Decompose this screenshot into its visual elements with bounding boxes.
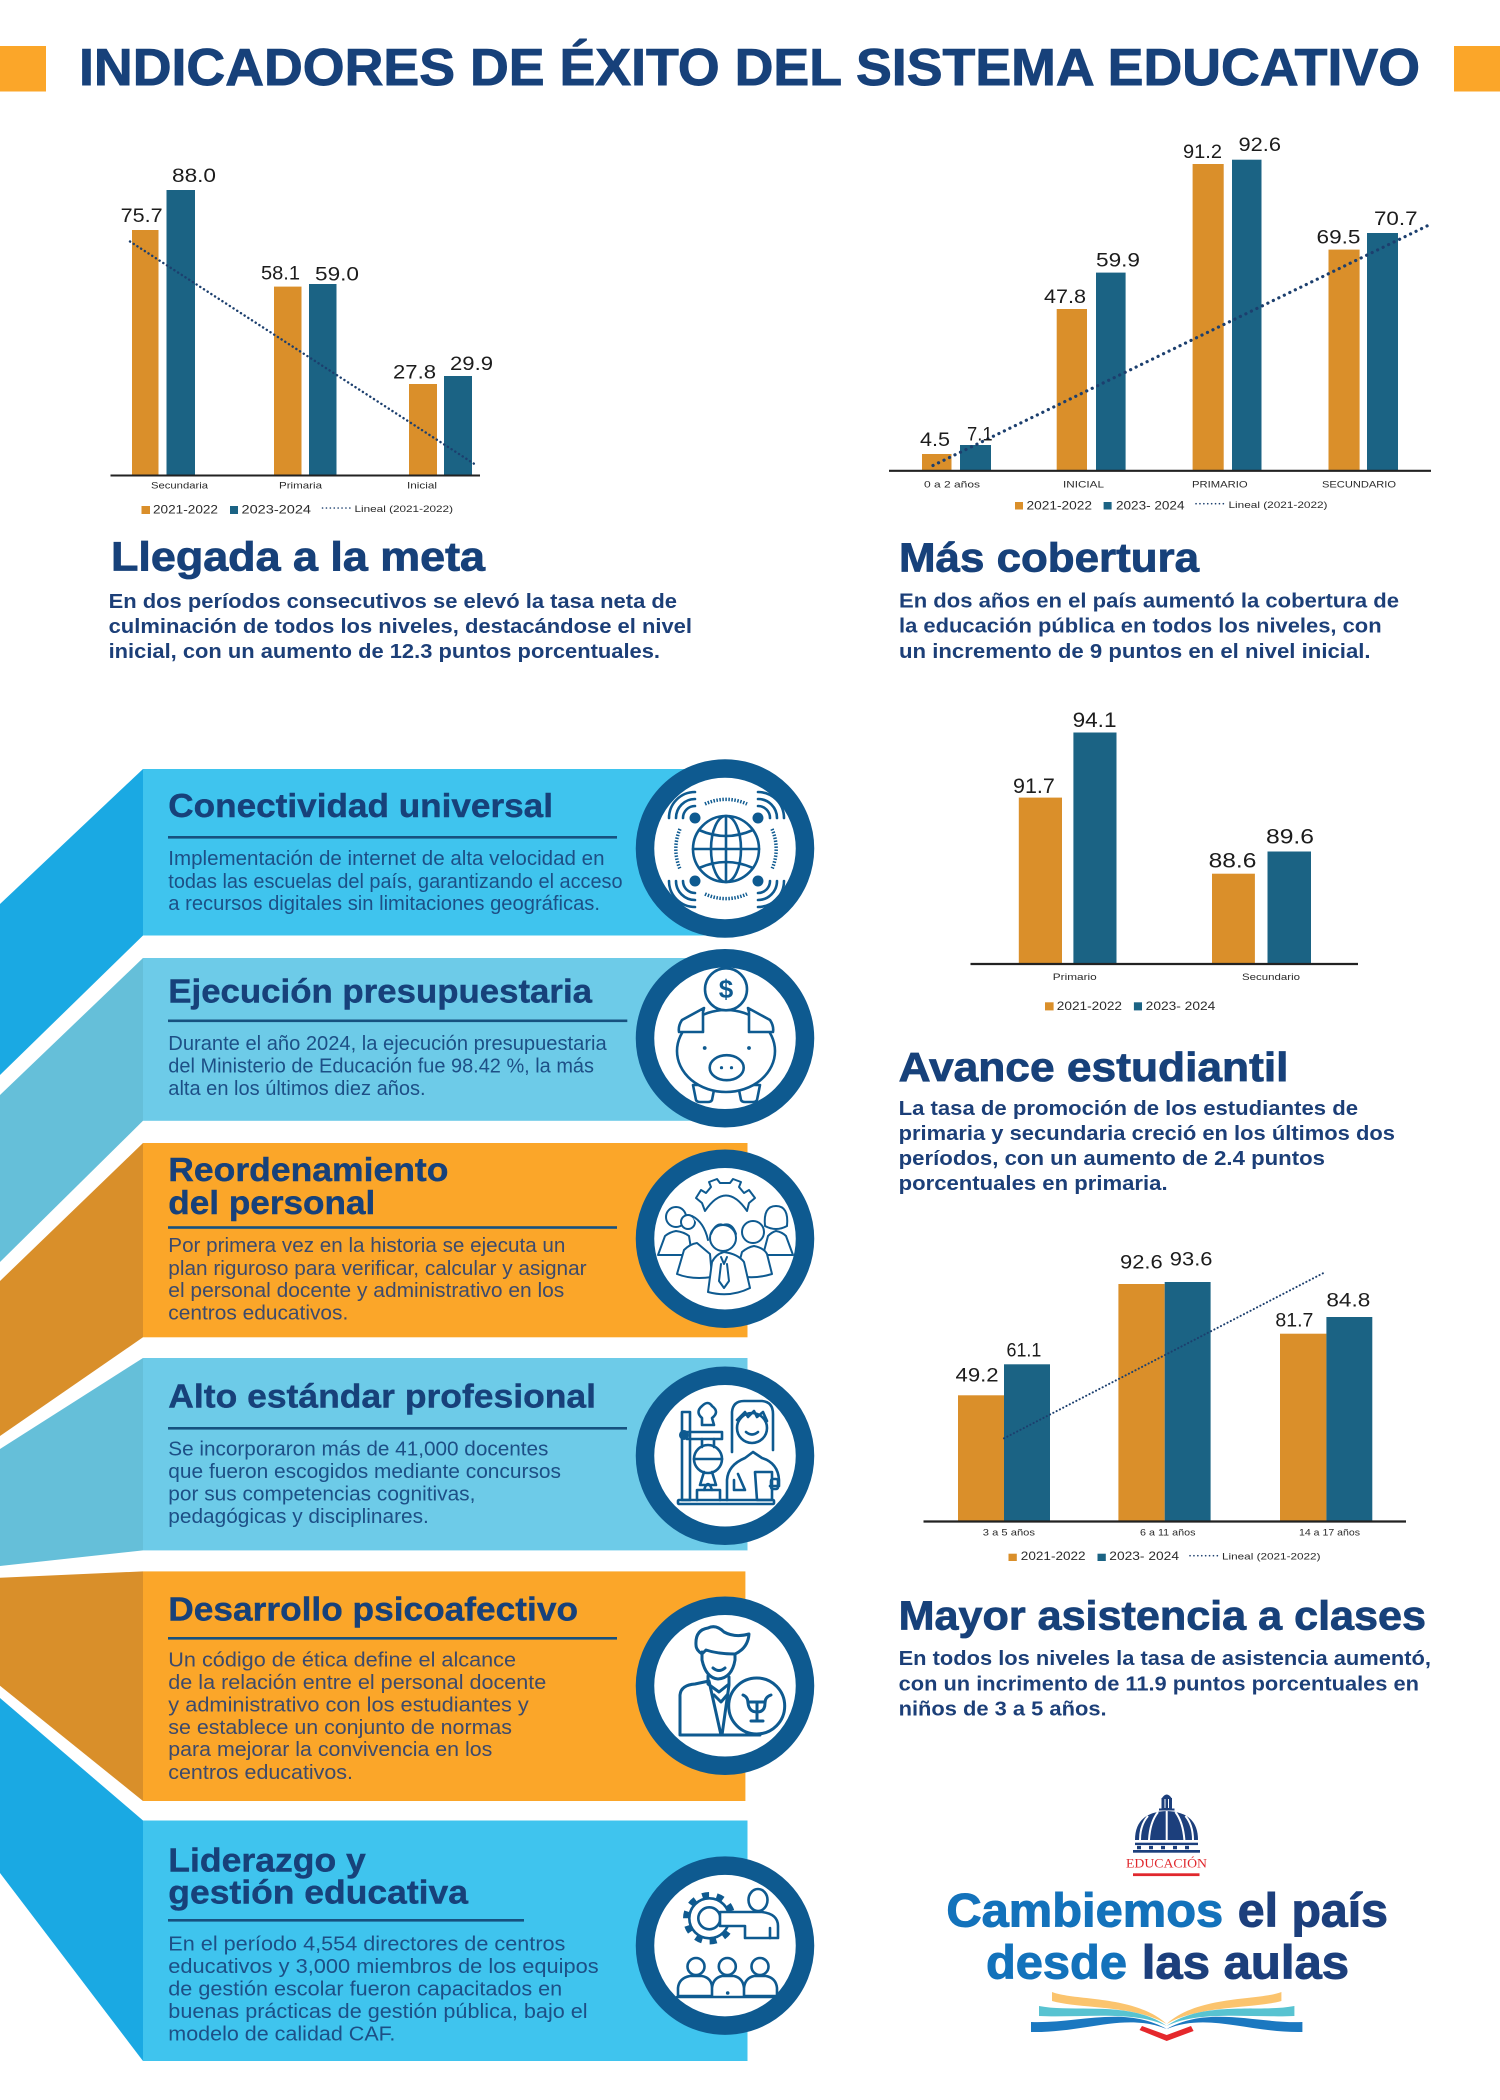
bar chart: Más cobertura: SECUNDARIO: [1322, 480, 1396, 491]
bar chart: Mayor asistencia a clases: 3 a 5 años: [983, 1528, 1035, 1539]
bar chart: Llegada a la meta: 27.8: [393, 363, 436, 384]
text block: Avance estudiantil: períodos, con un aumento de 2.4 puntos: [899, 1147, 1325, 1170]
body text: Durante el año 2024, la ejecución presupuestaria: [168, 1033, 608, 1055]
bar chart: Más cobertura: [889, 135, 1431, 512]
body text: Se incorporaron más de 41,000 docentes: [168, 1438, 548, 1460]
panel: Ejecución presupuestaria: [0, 958, 805, 1262]
bar chart: Llegada a la meta: 2023-2024: [242, 504, 312, 516]
bar chart: Más cobertura: Lineal (2021-2022): [1228, 500, 1328, 511]
text block: Avance estudiantil: La tasa de promoción de los estudiantes de: [899, 1097, 1358, 1120]
bar chart: Más cobertura: 92.6: [1238, 135, 1281, 156]
body text: [168, 1650, 546, 1784]
icon: management gear and team: [645, 1866, 805, 2026]
bar chart: Más cobertura: 47.8: [1044, 287, 1086, 308]
bar chart: Llegada a la meta: 75.7: [121, 206, 163, 227]
bar chart: Mayor asistencia a clases: [924, 1250, 1406, 1563]
heading: [168, 1151, 448, 1221]
body text: del Ministerio de Educación fue 98.42 %, la más: [168, 1056, 594, 1078]
body text: plan riguroso para verificar, calcular y asignar: [168, 1258, 587, 1280]
bar chart: Mayor asistencia a clases: 6 a 11 años: [1140, 1528, 1196, 1539]
bar chart: Avance estudiantil: [970, 709, 1358, 1013]
body text: pedagógicas y disciplinares.: [168, 1506, 429, 1528]
bar chart: Llegada a la meta: Lineal (2021-2022): [354, 504, 453, 515]
body text: educativos y 3,000 miembros de los equipos: [168, 1956, 599, 1978]
bar chart: Avance estudiantil: 2023- 2024: [1146, 1001, 1216, 1013]
text block: Avance estudiantil: primaria y secundaria creció en los últimos dos: [899, 1122, 1395, 1145]
bar chart: Avance estudiantil: 88.6: [1209, 850, 1256, 873]
panel: Conectividad universal: [0, 768, 805, 1075]
body text: por sus competencias cognitivas,: [168, 1483, 475, 1505]
heading: gestión educativa: [168, 1874, 469, 1911]
text block: Mayor asistencia a clases: [899, 1647, 1431, 1720]
bar chart: Llegada a la meta: 58.1: [261, 264, 300, 284]
heading: Ejecución presupuestaria: [168, 972, 593, 1010]
body text: [168, 1933, 599, 2046]
body text: [168, 1438, 561, 1528]
bar chart: Mayor asistencia a clases: 61.1: [1006, 1341, 1041, 1362]
text block: Mayor asistencia a clases: niños de 3 a 5 años.: [899, 1697, 1107, 1720]
heading: Liderazgo y: [168, 1841, 366, 1878]
text block: Llegada a la meta: En dos períodos consecutivos se elevó la tasa neta de: [109, 590, 677, 613]
bar chart: Llegada a la meta: 88.0: [172, 166, 216, 187]
bar chart: Más cobertura: 2021-2022: [1026, 500, 1092, 512]
bar chart: Más cobertura: 59.9: [1096, 250, 1140, 272]
body text: de la relación entre el personal docente: [168, 1672, 546, 1694]
text block: Más cobertura: En dos años en el país aumentó la cobertura de: [899, 590, 1399, 612]
bar chart: Avance estudiantil: Secundario: [1242, 972, 1300, 983]
body text: Implementación de internet de alta velocidad en: [168, 848, 605, 870]
icon: piggy bank: $: [719, 974, 734, 1004]
bar chart: Avance estudiantil: 91.7: [1013, 775, 1055, 798]
bar chart: Llegada a la meta: [110, 166, 493, 516]
bar chart: Más cobertura: PRIMARIO: [1192, 480, 1248, 491]
body text: centros educativos.: [168, 1302, 348, 1324]
bar chart: Llegada a la meta: 2021-2022: [153, 504, 218, 516]
panel: Liderazgo y gestión educativa: [0, 1698, 805, 2061]
text block: Más cobertura: un incremento de 9 puntos en el nivel inicial.: [899, 640, 1371, 663]
body text: Por primera vez en la historia se ejecuta un: [168, 1235, 565, 1257]
heading: [168, 1841, 469, 1911]
title banner: INDICADORES DE ÉXITO DEL SISTEMA EDUCATIVO: [79, 39, 1420, 97]
icon: scientist with flask: [645, 1376, 805, 1536]
bar chart: Mayor asistencia a clases: 14 a 17 años: [1299, 1528, 1360, 1539]
bar chart: Más cobertura: 4.5: [920, 430, 950, 451]
logo: Educación dome: EDUCACIÓN: [1126, 1856, 1208, 1871]
bar chart: Más cobertura: 69.5: [1316, 228, 1360, 248]
bar chart: Mayor asistencia a clases: 81.7: [1275, 1311, 1313, 1332]
text block: Mayor asistencia a clases: En todos los niveles la tasa de asistencia aumentó,: [899, 1647, 1431, 1670]
body text: centros educativos.: [168, 1762, 353, 1784]
bar chart: Llegada a la meta: Secundaria: [151, 480, 209, 491]
body text: a recursos digitales sin limitaciones geográficas.: [168, 893, 600, 915]
bar chart: Avance estudiantil: 94.1: [1073, 709, 1116, 732]
body text: todas las escuelas del país, garantizando el acceso: [168, 871, 623, 893]
slogan: [946, 1884, 1388, 1988]
heading: Reordenamiento: [168, 1151, 448, 1188]
bar chart: Mayor asistencia a clases: 92.6: [1120, 1252, 1163, 1273]
icon: globe with signals: [645, 768, 805, 928]
text block: Avance estudiantil: porcentuales en primaria.: [899, 1172, 1168, 1195]
text block: Avance estudiantil: [899, 1097, 1395, 1195]
bar chart: Más cobertura: INICIAL: [1063, 480, 1104, 491]
bar chart: Más cobertura: 91.2: [1183, 142, 1222, 163]
bar chart: Llegada a la meta: 59.0: [315, 264, 359, 286]
slogan: el país: [1238, 1884, 1388, 1937]
bar chart: Llegada a la meta: 29.9: [450, 354, 493, 375]
body text: [168, 1033, 608, 1100]
bar chart: Llegada a la meta: Inicial: [407, 480, 437, 491]
body text: [168, 848, 623, 915]
body text: y administrativo con los estudiantes y: [168, 1695, 529, 1717]
bar chart: Más cobertura: 0 a 2 años: [924, 480, 980, 491]
bar chart: Más cobertura: 7.1: [967, 425, 993, 446]
text block: Llegada a la meta: culminación de todos los niveles, destacándose el nivel: [109, 615, 692, 638]
body text: para mejorar la convivencia en los: [168, 1739, 492, 1761]
slogan: Cambiemos: [946, 1884, 1223, 1937]
bar chart: Más cobertura: 70.7: [1374, 209, 1418, 230]
logo: Educación dome: [1126, 1794, 1208, 1876]
heading: del personal: [168, 1184, 375, 1221]
body text: de gestión escolar fueron capacitados en: [168, 1978, 562, 2000]
icon: team with gear: [645, 1159, 805, 1319]
slogan: las aulas: [1142, 1935, 1349, 1988]
body text: En el período 4,554 directores de centros: [168, 1933, 565, 1955]
body text: que fueron escogidos mediante concursos: [168, 1461, 561, 1483]
bar chart: Mayor asistencia a clases: 49.2: [956, 1366, 999, 1387]
heading: Alto estándar profesional: [168, 1377, 596, 1414]
body text: se establece un conjunto de normas: [168, 1717, 512, 1739]
body text: el personal docente y administrativo en los: [168, 1280, 564, 1302]
bar chart: Avance estudiantil: 2021-2022: [1057, 1001, 1122, 1013]
heading: Más cobertura: Más cobertura: [899, 534, 1200, 580]
bar chart: Mayor asistencia a clases: 2023- 2024: [1109, 1551, 1180, 1563]
bar chart: Más cobertura: 2023- 2024: [1116, 500, 1185, 512]
heading: Avance estudiantil: Avance estudiantil: [899, 1044, 1288, 1090]
text block: Llegada a la meta: inicial, con un aumento de 12.3 puntos porcentuales.: [109, 640, 660, 663]
heading: Conectividad universal: [168, 787, 553, 824]
body text: modelo de calidad CAF.: [168, 2024, 395, 2046]
panel: Alto estándar profesional: [0, 1358, 805, 1566]
icon: psychologist: [645, 1606, 805, 1766]
body text: Un código de ética define el alcance: [168, 1650, 516, 1672]
panel: Reordenamiento del personal: [0, 1143, 805, 1436]
heading: Mayor asistencia a clases: Mayor asistencia a clases: [899, 1592, 1426, 1638]
bar chart: Mayor asistencia a clases: Lineal (2021-2022): [1222, 1551, 1320, 1562]
body text: [168, 1235, 587, 1324]
body text: alta en los últimos diez años.: [168, 1078, 426, 1100]
text block: Llegada a la meta: [109, 590, 692, 663]
heading: Desarrollo psicoafectivo: [168, 1590, 578, 1628]
bar chart: Llegada a la meta: Primaria: [279, 480, 323, 491]
body text: buenas prácticas de gestión pública, bajo el: [168, 2001, 588, 2023]
bar chart: Mayor asistencia a clases: 2021-2022: [1021, 1551, 1086, 1563]
text block: Mayor asistencia a clases: con un incrimento de 11.9 puntos porcentuales en: [899, 1672, 1419, 1695]
text block: Más cobertura: la educación pública en todos los niveles, con: [899, 615, 1382, 638]
heading: Llegada a la meta: Llegada a la meta: [111, 534, 486, 580]
panel: Desarrollo psicoafectivo: [0, 1571, 805, 1801]
bar chart: Avance estudiantil: Primario: [1053, 972, 1097, 983]
bar chart: Mayor asistencia a clases: 93.6: [1170, 1250, 1212, 1271]
text block: Más cobertura: [899, 590, 1399, 663]
icon: piggy bank: [645, 958, 805, 1118]
bar chart: Avance estudiantil: 89.6: [1266, 826, 1314, 848]
slogan: desde: [986, 1935, 1127, 1988]
bar chart: Mayor asistencia a clases: 84.8: [1326, 1290, 1370, 1311]
icon: open book: [1031, 1992, 1302, 2041]
